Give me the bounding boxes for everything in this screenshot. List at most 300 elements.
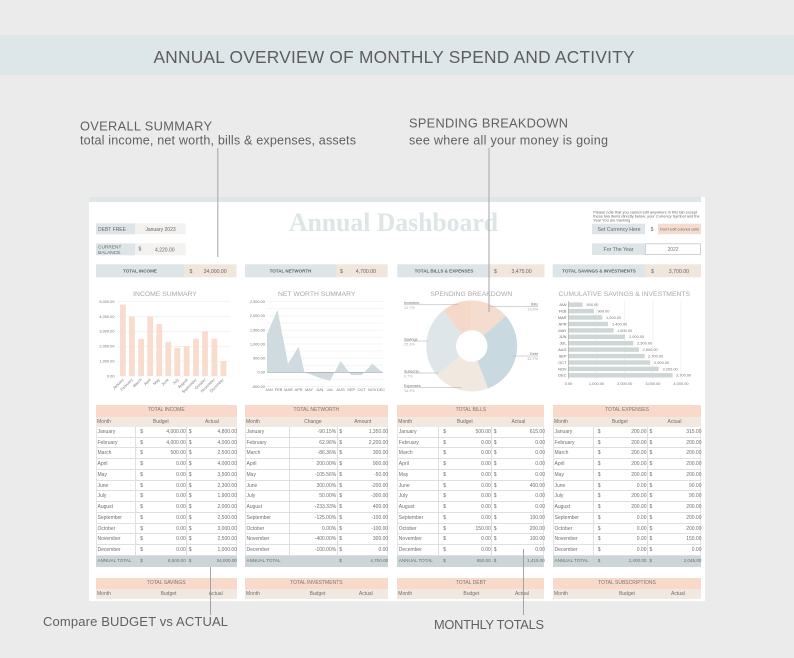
table: total networth: December (246, 547, 270, 553)
cumulative axis labels: 4,000.00 (673, 381, 689, 386)
table: total bills: October (399, 526, 417, 532)
table: total investments: Month (246, 591, 260, 597)
table: total bills: 0.00 (481, 440, 491, 446)
annotation: overall summary: OVERALL SUMMARY (80, 119, 212, 134)
table: total bills: $ (443, 440, 446, 446)
table columns: total networth: Change (304, 419, 322, 425)
settings note: Year You are tracking (593, 218, 630, 223)
chart: income summary: 1,000.00 (99, 358, 115, 364)
table: total bills: 0.00 (535, 461, 545, 467)
table: total income: May (98, 472, 107, 478)
donut labels: Investme.. (404, 301, 422, 305)
table: total bills: March (399, 450, 413, 456)
net worth month labels: JUL (327, 387, 334, 392)
table: total expenses: $ (649, 526, 652, 532)
table: total bills: $ (443, 526, 446, 532)
table: total expenses: $ (598, 526, 600, 532)
cumulative value labels: 2,300.00 (637, 341, 653, 346)
table: total bills: $ (494, 450, 497, 456)
table: total income: 0.00 (176, 515, 186, 521)
table columns: total networth: Month (246, 419, 260, 425)
table: total bills: $ (443, 547, 446, 553)
box: debt free (96, 223, 186, 234)
table: total bills: $ (443, 472, 446, 478)
table: total income: $ (140, 526, 143, 532)
chart title: cumulative savings and investments: CUMULATIVE SAVINGS & INVESTMENTS (559, 291, 691, 298)
table: total bills: December (399, 547, 422, 553)
table heading: total networth (245, 405, 388, 417)
table: total networth: -50.00 (374, 472, 388, 478)
table: total networth: $ (339, 515, 342, 521)
annotation: compare budget vs actual: Compare BUDGET vs ACTUAL (43, 614, 228, 629)
net worth month labels: MAY (305, 387, 314, 392)
annual total: bills: $ (443, 558, 446, 563)
table: total networth: -300.00 (371, 493, 388, 499)
table columns: total bills: Budget (457, 419, 473, 425)
table: total savings: Budget (161, 591, 176, 597)
table columns: total income: Month (97, 419, 111, 425)
table: total expenses: $ (598, 461, 600, 467)
box: current balance: BALANCE (98, 250, 120, 256)
table: total networth: $ (339, 504, 342, 510)
table: total expenses: $ (598, 429, 600, 435)
table: total income: 0.00 (176, 536, 186, 542)
slice: savings (426, 310, 462, 375)
chart title: net worth summary: NET WORTH SUMMARY (278, 291, 356, 298)
cumulative month labels: JUL (560, 341, 567, 346)
chart: net worth summary: 0.00 (257, 370, 266, 375)
net worth month labels: SEP (347, 387, 355, 392)
table: total bills: January (399, 429, 417, 435)
donut labels: Debt (530, 352, 539, 356)
annual total: income: $ (189, 558, 191, 563)
kpi: total income: 34,000.00 (204, 269, 227, 275)
table: total bills: 0.00 (481, 493, 491, 499)
table: total networth: 50.00% (319, 493, 336, 499)
donut labels: Subscrip.. (404, 370, 421, 374)
table: total expenses: 90.00 (689, 483, 701, 489)
slice: debt (477, 316, 517, 388)
income month labels: April (143, 377, 152, 386)
annual total: income (96, 556, 236, 567)
table heading: total income: TOTAL INCOME (148, 407, 185, 413)
table: total networth: $ (339, 536, 342, 542)
kpi: total income: $ (190, 269, 192, 275)
table: total networth: $ (339, 493, 342, 499)
table: total income: $ (189, 504, 192, 510)
chart: cumulative savings and investments (558, 291, 692, 386)
chart: net worth summary: 1,000.00 (250, 341, 266, 346)
table: total bills: 0.00 (481, 504, 491, 510)
setting: currency: Don't edit colored cells (660, 227, 699, 232)
net worth month labels: JUN (316, 387, 324, 392)
table: total networth: $ (339, 450, 342, 456)
cumulative month labels: NOV (558, 366, 567, 371)
cumulative axis labels (565, 381, 689, 386)
income month labels: December (208, 377, 225, 393)
cumulative month labels: OCT (558, 360, 567, 365)
annual total: expenses: 1,400.00 (629, 558, 646, 563)
table: total expenses: October (554, 526, 572, 532)
annotation: overall summary (80, 119, 356, 148)
table: total networth: 900.00 (373, 461, 388, 467)
annual total: bills: $ (494, 558, 496, 563)
table: total expenses: $ (598, 536, 600, 542)
table: total expenses: 200.00 (686, 450, 701, 456)
chart title: spending breakdown: SPENDING BREAKDOWN (430, 291, 512, 298)
table: total income: 4,000.00 (218, 461, 237, 467)
table: total income: $ (189, 461, 192, 467)
table: total income: 2,000.00 (218, 504, 237, 510)
annual total: networth (245, 556, 388, 567)
table: total bills: 0.00 (481, 450, 491, 456)
table: total savings: Actual (209, 591, 223, 597)
box: current balance (96, 243, 186, 256)
table: total expenses: $ (649, 547, 652, 553)
table: total subscriptions: Budget (619, 591, 635, 597)
table: total income: 4,000.00 (166, 440, 186, 446)
cumulative value labels: 500.00 (586, 302, 599, 307)
table: total bills: 500.00 (476, 429, 491, 435)
table: total income: 1,000.00 (218, 547, 237, 553)
table: total expenses: 200.00 (631, 440, 646, 446)
table: total income: June (98, 483, 108, 489)
table: total income: March (98, 450, 111, 456)
table: total expenses: $ (649, 504, 652, 510)
donut labels: 25.3% (404, 342, 415, 346)
table: total bills: $ (443, 515, 446, 521)
setting: for the year: 2022 (667, 247, 679, 253)
annual total: expenses: 2,045.00 (684, 558, 701, 563)
income month labels: September (181, 377, 198, 394)
table: total expenses: $ (598, 440, 600, 446)
table: total bills: 0.00 (481, 472, 491, 478)
table: total networth: -125.00% (315, 515, 336, 521)
table: total expenses: $ (649, 450, 652, 456)
table: total expenses: June (554, 483, 565, 489)
table: total networth: -200.00 (371, 483, 388, 489)
table: total networth: 2,200.00 (369, 440, 388, 446)
table: total bills: $ (443, 536, 446, 542)
table heading: total expenses: TOTAL EXPENSES (605, 407, 649, 413)
table: total subscriptions: TOTAL SUBSCRIPTIONS (598, 580, 656, 586)
table: total expenses: 200.00 (631, 461, 646, 467)
table heading: total income (96, 405, 236, 417)
table: total income: 2,500.00 (218, 536, 237, 542)
table: total expenses: 0.00 (637, 526, 646, 532)
net worth month labels (265, 387, 385, 392)
kpi: total savings and investments: TOTAL SAVINGS & INVESTMENTS (562, 269, 636, 274)
table: total bills: 400.00 (530, 483, 545, 489)
pointer: compare budget vs actual (210, 567, 212, 615)
table: total income: $ (140, 440, 143, 446)
pointer: monthly totals (522, 549, 524, 615)
table: total income: 2,500.00 (218, 515, 237, 521)
table: total expenses: $ (649, 440, 652, 446)
table: total income: $ (140, 450, 143, 456)
net worth month labels: JAN (265, 387, 273, 392)
cumulative month labels: APR (558, 321, 567, 326)
chart: income summary: 4,000.00 (99, 314, 115, 319)
slice: investments (443, 300, 472, 334)
settings note: these two items directly below; your Currency Symbol and the (593, 214, 700, 218)
table heading: total bills: TOTAL BILLS (456, 407, 486, 413)
table: total expenses: 200.00 (631, 472, 646, 478)
annual total: expenses (553, 556, 701, 567)
table: total expenses: 200.00 (686, 440, 701, 446)
chart: net worth summary: 2,000.00 (250, 313, 266, 318)
donut labels: Savings (404, 338, 418, 342)
table: total bills: 0.00 (481, 461, 491, 467)
table: total networth: August (246, 504, 262, 510)
table: total networth: $ (339, 472, 342, 478)
table: total income: 0.00 (176, 461, 186, 467)
table: total networth: -105.56% (315, 472, 336, 478)
table: total expenses: July (554, 493, 563, 499)
setting: currency: Set Currency Here (598, 227, 641, 233)
chart: net worth summary (250, 291, 385, 392)
table: total income: October (98, 526, 115, 532)
income month labels: November (199, 377, 216, 393)
table: total bills: February (399, 440, 419, 446)
table: total income: $ (189, 450, 192, 456)
table: total investments (245, 578, 388, 599)
table: total expenses: $ (598, 450, 600, 456)
table: total networth: April (246, 461, 257, 467)
table: total income: 3,000.00 (218, 526, 237, 532)
table: total bills: $ (494, 526, 497, 532)
table columns: total income: Actual (205, 419, 219, 425)
table: total income: November (98, 536, 121, 542)
kpi: total bills and expenses: 3,475.00 (511, 269, 532, 275)
table: total expenses: $ (649, 429, 652, 435)
kpi: total bills and expenses: TOTAL BILLS & EXPENSES (415, 269, 473, 274)
table: total income: April (98, 461, 108, 467)
table: total bills: $ (494, 483, 497, 489)
kpi: total savings and investments: $ (651, 269, 654, 275)
table: total expenses: $ (598, 504, 600, 510)
table: total expenses: August (554, 504, 570, 510)
sheet heading: annual dashboard: Annual Dashboard (289, 208, 499, 237)
cumulative bars (568, 302, 673, 378)
table: total income: $ (140, 536, 143, 542)
table: total income: 1,900.00 (218, 493, 237, 499)
table: total income: $ (140, 429, 143, 435)
chart: income summary: 3,000.00 (99, 329, 115, 334)
income month labels: March (132, 377, 143, 388)
kpi: total networth: 4,700.00 (356, 269, 376, 275)
dashboard sheet (88, 197, 705, 601)
donut labels: 0.7% (404, 374, 413, 378)
table: total income: 0.00 (176, 504, 186, 510)
table: total expenses: 315.00 (686, 429, 701, 435)
cumulative value labels: 2,500.00 (642, 347, 658, 352)
table: total expenses: $ (649, 536, 652, 542)
table columns: total networth (245, 417, 388, 427)
table: total savings (96, 578, 237, 599)
annual total: networth: $ (339, 558, 342, 563)
net worth month labels: OCT (358, 387, 366, 392)
table: total expenses: $ (598, 483, 600, 489)
table columns: total expenses (553, 417, 701, 427)
table: total debt: Month (398, 591, 412, 597)
table: total income: September (98, 515, 122, 521)
income month labels: January (111, 377, 125, 390)
table: total income: 4,000.00 (166, 429, 186, 435)
chart: net worth summary: 500.00 (253, 355, 266, 360)
cumulative value labels: 3,700.00 (676, 373, 692, 378)
table: total expenses: May (554, 472, 564, 478)
table: total income: 3,500.00 (218, 472, 237, 478)
table: total bills (397, 405, 544, 567)
table: total networth: -90.15% (318, 429, 336, 435)
table: total income: 0.00 (176, 483, 186, 489)
table: total bills: $ (443, 504, 446, 510)
net worth month labels: FEB (275, 387, 283, 392)
cumulative value labels: 1,600.00 (617, 328, 633, 333)
table: total expenses: 200.00 (631, 450, 646, 456)
annual total: income: 34,000.00 (217, 558, 237, 563)
table: total bills: 0.00 (481, 536, 491, 542)
cumulative month labels: AUG (558, 347, 566, 352)
annotation: spending breakdown: see where all your money is going (409, 134, 608, 148)
table: total income: February (98, 440, 118, 446)
kpi: total savings and investments (553, 264, 701, 277)
cumulative month labels (558, 302, 567, 378)
settings note (593, 209, 700, 223)
annotation: overall summary: total income, net worth, bills & expenses, assets (80, 134, 356, 148)
table: total bills: 100.00 (530, 515, 545, 521)
table: total expenses: September (554, 515, 579, 521)
box: current balance: $ (138, 246, 142, 252)
cumulative value labels: 1,200.00 (606, 315, 622, 320)
table: total income: $ (189, 440, 192, 446)
net worth month labels: MAR (284, 387, 293, 392)
table: total bills: 0.00 (535, 440, 545, 446)
chart: income summary: 5,000.00 (99, 299, 115, 304)
table: total expenses: April (554, 461, 565, 467)
table: total expenses: 200.00 (686, 515, 701, 521)
table: total expenses: 200.00 (686, 504, 701, 510)
table: total income: $ (189, 429, 192, 435)
page title: ANNUAL OVERVIEW OF MONTHLY SPEND AND ACTIVITY (154, 47, 635, 67)
table: total investments: Actual (359, 591, 373, 597)
donut labels: 32.7% (527, 357, 539, 361)
box: debt free: DEBT FREE (98, 227, 127, 233)
table: total bills: $ (494, 461, 497, 467)
table: total expenses: 200.00 (631, 504, 646, 510)
table: total networth: $ (339, 526, 342, 532)
chart title: income summary: INCOME SUMMARY (133, 291, 197, 298)
kpi: total bills and expenses: $ (494, 269, 497, 275)
table: total bills: $ (494, 515, 497, 521)
annual total: bills (397, 556, 544, 567)
pointer: overall summary (217, 148, 219, 257)
table: total income: $ (140, 504, 143, 510)
table: total bills: 0.00 (535, 547, 545, 553)
annotation: spending breakdown (409, 115, 608, 148)
table: total networth: February (246, 440, 267, 446)
table: total expenses: December (554, 547, 578, 553)
cumulative month labels: MAY (558, 328, 567, 333)
table: total networth (245, 405, 388, 567)
donut labels (404, 301, 539, 393)
table: total income: $ (140, 493, 143, 499)
table: total expenses: November (554, 536, 578, 542)
cumulative value labels (586, 302, 692, 378)
table: total expenses: $ (598, 547, 600, 553)
table: total subscriptions: Month (554, 591, 568, 597)
table: total networth: $ (339, 461, 342, 467)
table: total networth: 1,350.00 (369, 429, 388, 435)
chart: net worth summary: -500.00 (252, 384, 266, 389)
donut leader lines (404, 305, 538, 388)
table: total networth: 400.00 (373, 504, 388, 510)
table: total bills: April (399, 461, 409, 467)
table columns: total expenses: Budget (612, 419, 628, 425)
table: total income: $ (140, 472, 143, 478)
table: total savings: TOTAL SAVINGS (147, 580, 186, 586)
annual total: networth: ANNUAL TOTAL (246, 558, 281, 563)
table: total expenses: $ (598, 472, 600, 478)
annual total: bills: 1,415.00 (527, 558, 545, 563)
setting: currency (592, 224, 701, 234)
donut labels: 12.7% (404, 306, 415, 310)
setting: currency: $ (651, 227, 654, 233)
chart: income summary: 2,000.00 (99, 344, 115, 349)
income month labels: May (152, 377, 161, 386)
table: total expenses: $ (649, 472, 652, 478)
box: debt free: January 2023 (145, 227, 176, 233)
table: total networth: -400.00% (315, 536, 336, 542)
table: total income: 2,500.00 (218, 450, 237, 456)
setting: for the year (592, 243, 700, 255)
cumulative axis labels: 0.00 (565, 381, 573, 386)
donut labels: 14.9% (404, 389, 415, 393)
annual total: income: $ (140, 558, 143, 563)
table: total networth: 300.00% (316, 483, 336, 489)
table: total income: $ (189, 472, 192, 478)
table: total income: 0.00 (176, 526, 186, 532)
table: total networth: May (246, 472, 256, 478)
table: total income: August (98, 504, 113, 510)
table: total bills: $ (494, 429, 497, 435)
annual total: expenses: $ (598, 558, 600, 563)
table: total networth: July (246, 493, 255, 499)
cumulative month labels: FEB (559, 308, 567, 314)
table: total expenses: 150.00 (686, 536, 701, 542)
table: total expenses: $ (649, 493, 652, 499)
table: total networth: $ (339, 547, 342, 553)
table: total income: 4,800.00 (218, 429, 237, 435)
table: total networth: 300.00 (373, 450, 388, 456)
table: total debt: Budget (463, 591, 479, 597)
annotation: spending breakdown: SPENDING BREAKDOWN (409, 115, 568, 130)
table columns: total income: Budget (153, 419, 169, 425)
table heading: total networth: TOTAL NETWORTH (294, 407, 339, 413)
table: total income: July (98, 493, 106, 499)
cumulative value labels: 1,400.00 (612, 321, 628, 326)
income month labels (111, 377, 225, 394)
table: total expenses: $ (649, 515, 652, 521)
table: total networth: September (246, 515, 271, 521)
table: total income: December (98, 547, 121, 553)
table: total bills: 0.00 (481, 515, 491, 521)
annotation: monthly totals: MONTHLY TOTALS (434, 617, 544, 632)
table: total networth: March (246, 450, 260, 456)
cumulative month labels: SEP (559, 354, 567, 358)
chart: spending breakdown donut (404, 291, 539, 393)
